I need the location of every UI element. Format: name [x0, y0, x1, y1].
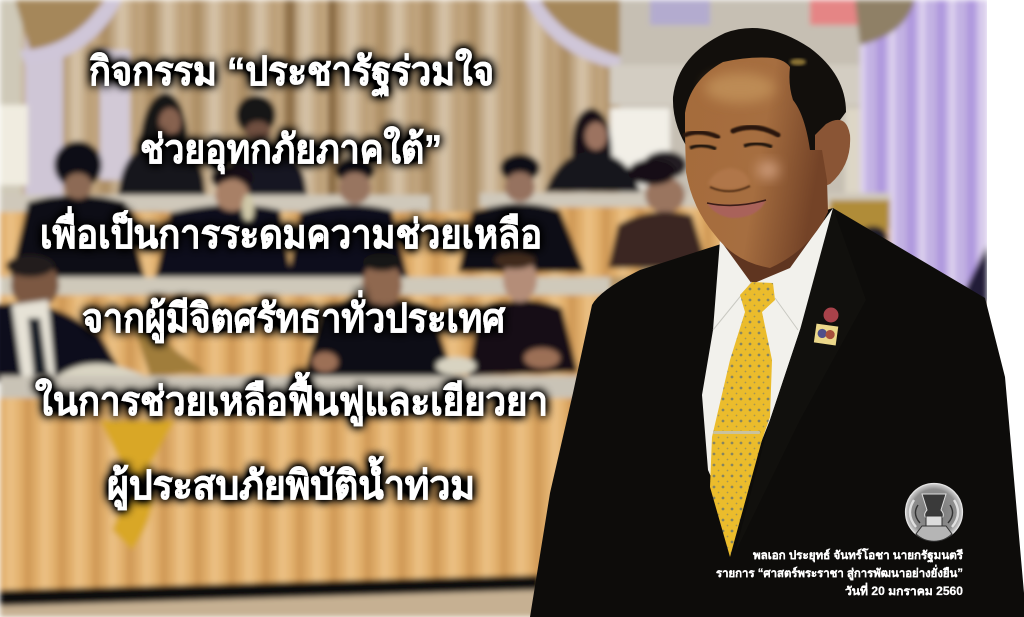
lapel pin — [824, 308, 838, 322]
portrait: man in dark suit and yellow tie — [530, 28, 1024, 617]
forehead highlight — [705, 73, 775, 103]
headline line 4: จากผู้มีจิตศรัทธาทั่วประเทศ — [82, 290, 506, 343]
wall and columns — [620, 0, 860, 260]
middle row people — [10, 195, 145, 278]
caption line 2: รายการ “ศาสตร์พระราชา สู่การพัฒนาอย่างยั่งยืน” — [716, 564, 963, 581]
caption line 3: วันที่ 20 มกราคม 2560 — [845, 582, 963, 598]
upper tables — [0, 212, 640, 277]
headline line 3: เพื่อเป็นการระดมความช่วยเหลือ — [40, 206, 542, 257]
front row people — [0, 303, 125, 382]
seal: Royal Thai Government emblem — [906, 484, 962, 541]
nose — [708, 168, 750, 190]
eyes — [690, 146, 716, 149]
eyebrows — [685, 132, 718, 137]
black floor strip and floor — [0, 575, 540, 608]
neck — [722, 220, 828, 285]
cheek highlight — [757, 161, 779, 179]
mask outside the photo — [987, 0, 1024, 617]
mouth — [707, 200, 766, 218]
ear — [815, 120, 850, 190]
lapel shading — [735, 208, 866, 553]
lavender curtain — [860, 0, 987, 290]
caption — [716, 547, 964, 598]
caption line 1: พลเอก ประยุทธ์ จันทร์โอชา นายกรัฐมนตรี — [753, 547, 964, 563]
tie — [710, 282, 775, 557]
shirt and collar — [702, 208, 836, 520]
lapel badge — [814, 324, 838, 345]
headline block — [35, 48, 548, 510]
face — [685, 58, 828, 268]
hair shine — [790, 58, 806, 66]
suit jacket — [530, 208, 1024, 617]
headline line 1: กิจกรรม “ประชารัฐร่วมใจ — [89, 48, 494, 98]
front table — [0, 376, 580, 398]
headline line 2: ช่วยอุทกภัยภาคใต้” — [140, 126, 442, 175]
back curtains — [0, 0, 640, 215]
middle table — [0, 277, 610, 295]
drape swags — [15, 0, 100, 50]
headline line 5: ในการช่วยเหลือฟื้นฟูและเยียวยา — [35, 372, 548, 426]
back row people — [138, 92, 190, 190]
hair — [673, 28, 846, 152]
headline line 6: ผู้ประสบภัยพิบัติน้ำท่วม — [107, 456, 475, 510]
tie clip — [713, 431, 760, 434]
